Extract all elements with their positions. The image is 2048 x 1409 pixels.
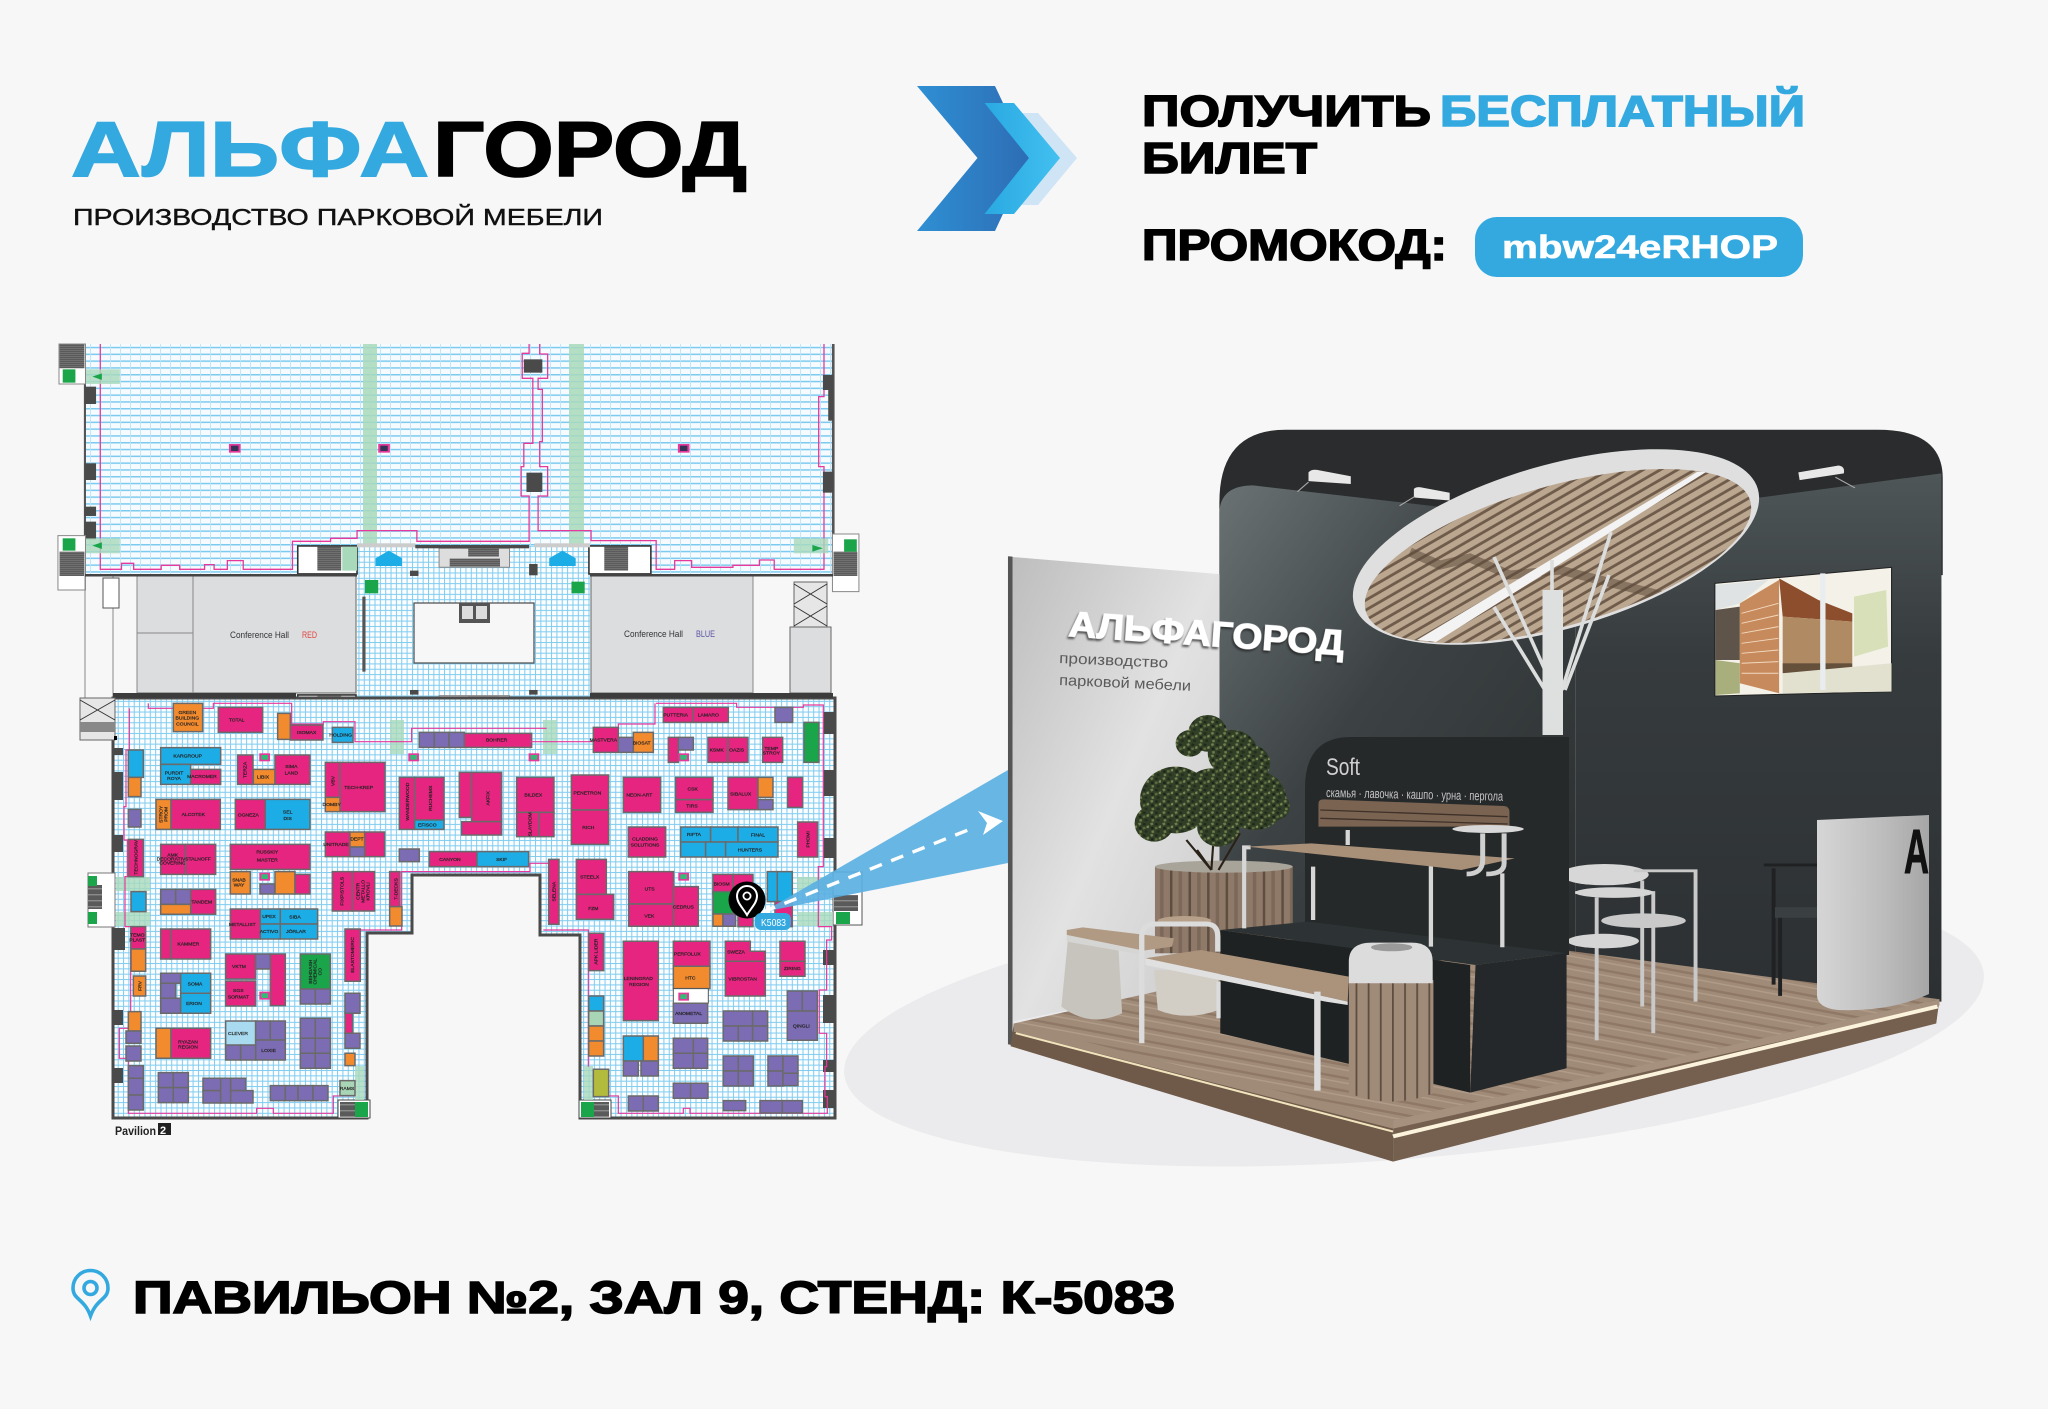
booths: west section: RYAZAN — [178, 1040, 198, 1046]
booths: east section: FINAL — [751, 833, 765, 839]
booths: west section: PROM — [164, 807, 170, 822]
icon: chevron arrows — [917, 86, 1077, 231]
booths: east section: PHOMI — [806, 831, 812, 847]
booths: east section: SOLUTIONS — [631, 843, 660, 849]
booth tag K5083: K5083 — [761, 917, 786, 929]
booths: west section: FRV — [137, 980, 143, 991]
heading: get a free ticket: БИЛЕТ — [1142, 134, 1317, 183]
booths: west section: PLAST — [129, 937, 145, 943]
booths: west section: COUNCIL — [176, 721, 199, 727]
wall TV with pergola photo — [1715, 567, 1892, 696]
booths: west section: COVERING — [159, 861, 186, 867]
logo: ГОРОД — [433, 105, 747, 193]
booths: west section: LIBIX — [257, 775, 270, 781]
booths: west section: DECORATIVE — [157, 857, 189, 863]
upper bench — [1244, 799, 1524, 947]
booths: west section: KAMMER — [177, 941, 200, 947]
stool and drum — [1061, 916, 1218, 1019]
lower hall walls and exits — [80, 693, 862, 1118]
lower hall floor — [113, 698, 835, 1118]
canopy pergola with pole — [1352, 449, 1760, 735]
planter and tree — [1135, 715, 1293, 953]
icon: map pin at booth — [728, 882, 766, 918]
booths: west section: GREEN — [178, 710, 197, 716]
booths: east section: PUTTERIA — [663, 713, 689, 719]
booths: west section: TERZA — [243, 761, 249, 778]
service corridors — [85, 574, 833, 698]
booths: west section: DEPT — [350, 837, 364, 843]
booths: west section: TOTAL — [229, 718, 245, 724]
booths: east section: LENINGRAD — [624, 976, 653, 982]
tagline: ПРОИЗВОДСТВО ПАРКОВОЙ МЕБЕЛИ — [73, 203, 603, 230]
booths: east section: RICH — [582, 825, 595, 831]
booths: west section: MACROMER — [187, 774, 217, 780]
booths: east section: RIFTA — [687, 832, 702, 838]
logo — [71, 105, 747, 193]
booths: east section: SIBALUX — [730, 792, 752, 798]
booths: west section: ALCOTEK — [182, 812, 206, 818]
spot lamps — [1297, 466, 1855, 506]
booths: west section: ERION — [186, 1001, 202, 1007]
arrow: dashed — [763, 811, 1003, 912]
wall logo text: парковой мебели — [1059, 672, 1191, 695]
wall logo text: АЛЬФАГОРОД — [1067, 605, 1346, 663]
booths: west section: BILDEX — [524, 793, 543, 799]
booth tag K5083 — [755, 913, 791, 930]
booths: west section: SOMA — [188, 982, 203, 988]
booths: west section: RUSSKIY — [256, 850, 279, 856]
panel: conference hall red — [137, 576, 356, 693]
booths: east section: LAMARO — [698, 713, 719, 719]
booths: west section: CANYON — [439, 857, 461, 863]
booths: west section: UPEX — [262, 914, 276, 920]
booths: west section: REGION — [178, 1045, 198, 1051]
booths: east section: PERFOLUX — [674, 952, 701, 958]
booths: west section: UNITRADE — [323, 842, 349, 848]
stand floor shadow ellipse — [832, 841, 1996, 1207]
booths: east section: SELENA — [552, 881, 558, 901]
exhibition stand 3D — [1008, 410, 1943, 1162]
promo code label: ПРОМОКОД: — [1142, 221, 1447, 270]
booths: west section: TECH-KREP — [344, 785, 374, 791]
booths: east section: ANOMETAL — [675, 1011, 702, 1017]
booths: west section: SIMA — [285, 764, 298, 770]
booths: east section: CSK — [688, 787, 698, 793]
booths: east section: HUNTERS — [738, 848, 763, 854]
booths: west section: DOMBY — [323, 802, 341, 808]
booths: west section: WANDERWOOD — [405, 782, 411, 821]
booths: east section: BIOSM — [714, 881, 730, 887]
booths: west section: VBV — [331, 775, 337, 786]
booths: west section: SKIF — [496, 857, 507, 863]
floor plan — [58, 344, 862, 1138]
dark bench box — [1220, 922, 1567, 1093]
booths: east section: TIRS — [686, 803, 698, 809]
furniture behind partition: table and chairs — [1560, 864, 1696, 1040]
booths: east section: CLADDING — [632, 837, 658, 843]
booths: west section: OGNEZA — [238, 812, 260, 818]
booths: west section: TANDEM — [191, 900, 212, 906]
panel: conference hall blue: Conference Hall — [624, 629, 683, 640]
partition board with text: Soft — [1326, 754, 1360, 781]
booths: west section: ELASTOMERIC — [350, 937, 356, 973]
booths: west section: BUILDING — [176, 715, 199, 721]
booths: west section: WAY — [234, 883, 245, 889]
booths: east section: KSMK — [710, 748, 724, 754]
booths: west section: T-DECKS — [393, 878, 399, 900]
podium with logo mark: А — [1904, 818, 1929, 887]
booths: west section: PURDIT — [165, 771, 183, 777]
icon: location pin — [73, 1270, 108, 1316]
promo code pill — [1475, 217, 1803, 277]
booths: west section: HOLDING — [329, 733, 352, 739]
booths: east section: TEMP — [764, 746, 779, 752]
booths: east section: CEDRUS — [673, 904, 695, 910]
booths: west section: EFISCO — [418, 823, 437, 829]
pavilion label: 2 — [160, 1125, 166, 1137]
booths: west section: SEL — [283, 809, 293, 815]
booths: west section: SGS — [233, 988, 244, 994]
booths: west section: ROYA — [167, 776, 182, 782]
atrium lobby — [298, 543, 651, 720]
booths: west section: TECHNOGRAV — [133, 839, 139, 875]
dark chair — [1764, 865, 1819, 996]
booths: west section: DIS — [283, 816, 292, 822]
booths: east section: BIOSAT — [633, 741, 651, 747]
booths: east section: STEELX — [580, 875, 600, 881]
booths: west section: STALNOFF — [185, 857, 211, 863]
booths: east section: VEK — [644, 913, 655, 919]
booths: west section: SNAB — [232, 877, 246, 883]
booths: east section: HTC — [685, 975, 696, 981]
booths: west section: SIBA — [289, 915, 301, 921]
partition board with text: скамья · лавочка · кашпо · урна · пергола — [1326, 785, 1504, 804]
wall logo text: производство — [1059, 650, 1168, 672]
wall logo text — [1059, 605, 1346, 695]
booths: east section: MASTVERA — [590, 737, 618, 743]
booths: east section: FZM — [588, 906, 598, 912]
stand structure: walls and floor — [1008, 430, 1943, 1162]
trash bin — [1349, 943, 1433, 1102]
booths: west section: SLAYDOM — [527, 812, 533, 836]
booths: east section: APK LIDER — [594, 938, 600, 965]
booths: east section — [530, 703, 832, 1113]
booths: west section: AKFIX — [485, 790, 491, 806]
booths: west section: CO — [318, 968, 324, 975]
upper hall — [84, 344, 835, 576]
partition board with text — [1305, 737, 1569, 955]
booths: west section: JÖRLAR — [286, 928, 306, 935]
pavilion label — [115, 1123, 171, 1138]
booths: west section: ISOMAX — [297, 730, 317, 736]
logo: АЛЬФА — [71, 105, 429, 193]
booths: east section: REGION — [629, 982, 649, 988]
booths: west section: AMK — [167, 853, 179, 859]
booths: east section: OAZIS — [729, 748, 745, 754]
booths: west section: VKTM — [232, 964, 246, 970]
panel: conference hall blue: BLUE — [696, 629, 715, 640]
booths: east section: QINGLI — [793, 1024, 810, 1030]
heading: get a free ticket — [1142, 85, 1805, 183]
booths: west section: ACTIVO — [260, 929, 278, 935]
booths: west section: FIXPISTOLS — [340, 876, 346, 906]
booths: west section: RUCHEMS — [428, 785, 434, 811]
pavilion label: Pavilion — [115, 1126, 156, 1138]
podium with logo mark — [1817, 815, 1929, 1010]
panel: conference hall blue — [591, 576, 753, 693]
booths: west section: TEMO — [130, 933, 145, 939]
booths: east section: ZIRING — [784, 966, 801, 972]
booths: west section: LOXIE — [261, 1048, 277, 1054]
lower bench — [1142, 924, 1349, 1091]
booths: east section: STROY — [763, 751, 781, 757]
heading: get a free ticket: ПОЛУЧИТЬ — [1142, 87, 1431, 136]
booths: west section: MASTER — [257, 857, 278, 863]
booths: west section: SORMAT — [228, 995, 249, 1001]
booths: west section: BEHDASH — [308, 959, 314, 984]
booths: west section: METALLIST — [229, 922, 256, 928]
booths: west section: CENTR — [355, 882, 361, 900]
booths: west section: CHEMICAL — [313, 959, 319, 985]
promo code pill: mbw24eRHOP — [1502, 229, 1778, 265]
booths: west section: KARGROUP — [173, 754, 203, 760]
booths: west section: KROVLI — [365, 882, 371, 900]
panel: conference hall red: RED — [302, 630, 317, 641]
heading: get a free ticket: БЕСПЛАТНЫЙ — [1440, 85, 1805, 136]
booths: west section: METALLO — [360, 880, 366, 903]
booths: west section — [119, 703, 554, 1113]
booths: west section: STROY — [158, 805, 164, 823]
booths: east section: PENETRON — [573, 790, 602, 796]
panel: conference hall red: Conference Hall — [230, 630, 289, 641]
booths: east section: UTS — [645, 887, 655, 893]
booths: west section: CLEVER — [228, 1031, 248, 1037]
stair towers and exits upper hall — [58, 344, 859, 592]
booths: west section: RAMS — [340, 1086, 355, 1092]
booths: east section: VIBROSTAN — [728, 977, 757, 983]
booths: east section: NEON-ART — [626, 793, 652, 799]
address text: ПАВИЛЬОН №2, ЗАЛ 9, СТЕНД: К-5083 — [133, 1272, 1175, 1323]
booths: west section: LAND — [285, 771, 298, 777]
booths: west section: BOHRER — [486, 738, 508, 744]
projection beam from booth to stand — [763, 770, 1008, 912]
booths: east section: SWEZA — [727, 949, 746, 955]
